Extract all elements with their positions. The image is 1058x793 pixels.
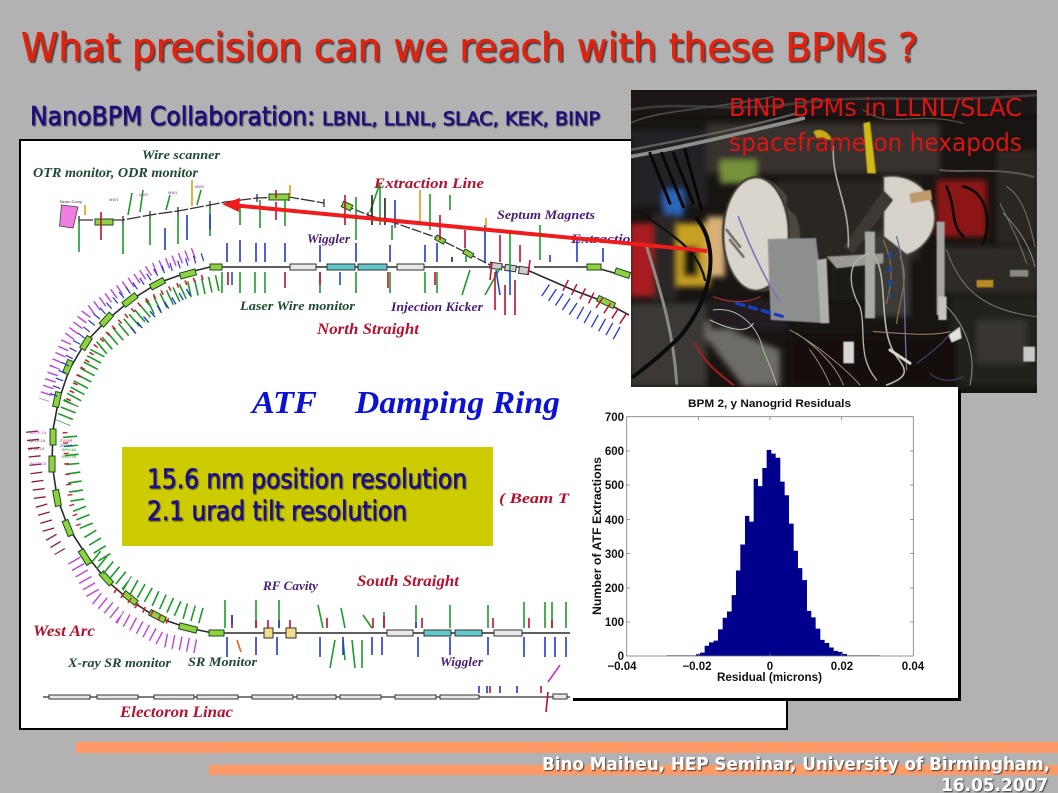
diagram labels: Electoron Linac [119, 704, 233, 721]
tiny magnet labels: BH1R.15 [30, 430, 47, 435]
histogram bars [667, 450, 880, 656]
diagram labels: SR Monitor [188, 654, 258, 669]
diagram labels: ( Beam T [499, 491, 570, 507]
x tick labels: 0.04 [902, 661, 925, 673]
footer credit [542, 754, 1050, 793]
y tick labels: 200 [605, 583, 624, 595]
chart axes [627, 417, 913, 656]
photo blurred tonal areas [631, 122, 1037, 387]
x tick labels: 0.02 [831, 661, 853, 673]
photo: BINP BPMs on hexapods [630, 90, 1038, 393]
tiny magnet labels: MW1 [168, 190, 178, 195]
callout: resolution box: 15.6 nm position resolution [147, 464, 467, 495]
callout: resolution box [122, 447, 493, 546]
diagram labels: RF Cavity [262, 578, 318, 593]
callout: resolution box: 2.1 urad tilt resolution [147, 496, 407, 527]
tiny magnet labels: ZH25R [60, 443, 73, 448]
photo caption [729, 93, 1022, 157]
y tick labels: 400 [605, 515, 624, 527]
tiny magnet labels: MW3 [109, 197, 119, 202]
y tick labels: 700 [605, 412, 624, 424]
tiny magnet labels: Beam Dump [60, 199, 83, 204]
tiny magnet labels: ZV24R [60, 438, 73, 443]
photo caption: spaceframe on hexapods [729, 128, 1022, 157]
diagram labels: Wire scanner [142, 147, 221, 162]
diagram labels: Wiggler [440, 654, 484, 669]
tiny magnet labels: BH1R.15 [30, 461, 47, 466]
tiny magnet labels: MW0 [195, 184, 205, 189]
south straight ticks [225, 600, 566, 712]
diagram labels: North Straight [316, 321, 420, 338]
x tick labels [607, 661, 925, 673]
arrow: photo to extraction line [222, 198, 707, 251]
tiny magnet labels: MW2 [139, 192, 149, 197]
beam dump [60, 205, 78, 228]
arc labels and ticks [32, 253, 625, 647]
x axis title: Residual (microns) [717, 672, 822, 684]
photo caption: BINP BPMs in LLNL/SLAC [729, 93, 1022, 122]
extraction element ticks [79, 180, 540, 280]
y tick labels: 300 [605, 549, 624, 561]
tiny magnet labels [28, 184, 205, 466]
photo cables [630, 95, 1037, 385]
title: What precision can we reach with these BPMs ? [21, 26, 918, 71]
x tick labels: −0.02 [682, 661, 712, 673]
chart title: BPM 2, y Nanogrid Residuals [688, 398, 851, 410]
diagram labels: Laser Wire monitor [239, 298, 356, 313]
y tick labels: 600 [605, 446, 624, 458]
y axis title: Number of ATF Extractions [592, 457, 604, 615]
diagram labels: OTR monitor, ODR monitor [33, 166, 199, 181]
y tick labels [605, 412, 624, 663]
linac beam pipe [43, 696, 570, 698]
panel: ATF damping ring diagram [20, 140, 787, 729]
footer bars [76, 742, 1058, 775]
subtitle: collaboration: NanoBPM Collaboration: [30, 102, 315, 132]
diagram labels: Injection Kicker [390, 299, 484, 314]
wiggler and cavity boxes [49, 262, 567, 699]
y tick labels: 100 [605, 617, 624, 629]
tiny magnet labels: BPM.49 [62, 454, 77, 459]
tiny magnet labels: BPM.60 [62, 447, 77, 452]
diagram labels: West Arc [33, 623, 95, 640]
tiny magnet labels: QF2R.14 [28, 446, 45, 451]
diagram labels: Extraction Line [373, 176, 484, 192]
diagram labels: Septum Magnets [497, 207, 595, 222]
x tick labels: 0 [767, 661, 773, 673]
subtitle: collaboration [30, 102, 600, 132]
diagram labels: Extraction [570, 231, 639, 246]
panel: residual histogram [573, 387, 961, 701]
diagram labels: Wiggler [307, 231, 351, 246]
diagram labels: ATF [250, 384, 317, 420]
ring beam pipe [52, 267, 629, 633]
green dipole magnets [49, 194, 631, 636]
x tick labels: −0.04 [607, 661, 637, 673]
north straight ticks [222, 240, 603, 315]
tiny magnet labels: QF1R.14 [29, 438, 46, 443]
diagram labels: X-ray SR monitor [67, 655, 172, 670]
y tick labels: 0 [618, 651, 624, 663]
diagram labels: South Straight [357, 573, 460, 590]
extraction line beam pipe [79, 193, 490, 265]
y tick labels: 500 [605, 480, 624, 492]
photo sharp hardware [723, 90, 1038, 386]
subtitle: collaboration: LBNL, LLNL, SLAC, KEK, BINP [322, 108, 600, 130]
diagram labels [33, 147, 639, 721]
diagram labels: Damping Ring [354, 384, 560, 420]
